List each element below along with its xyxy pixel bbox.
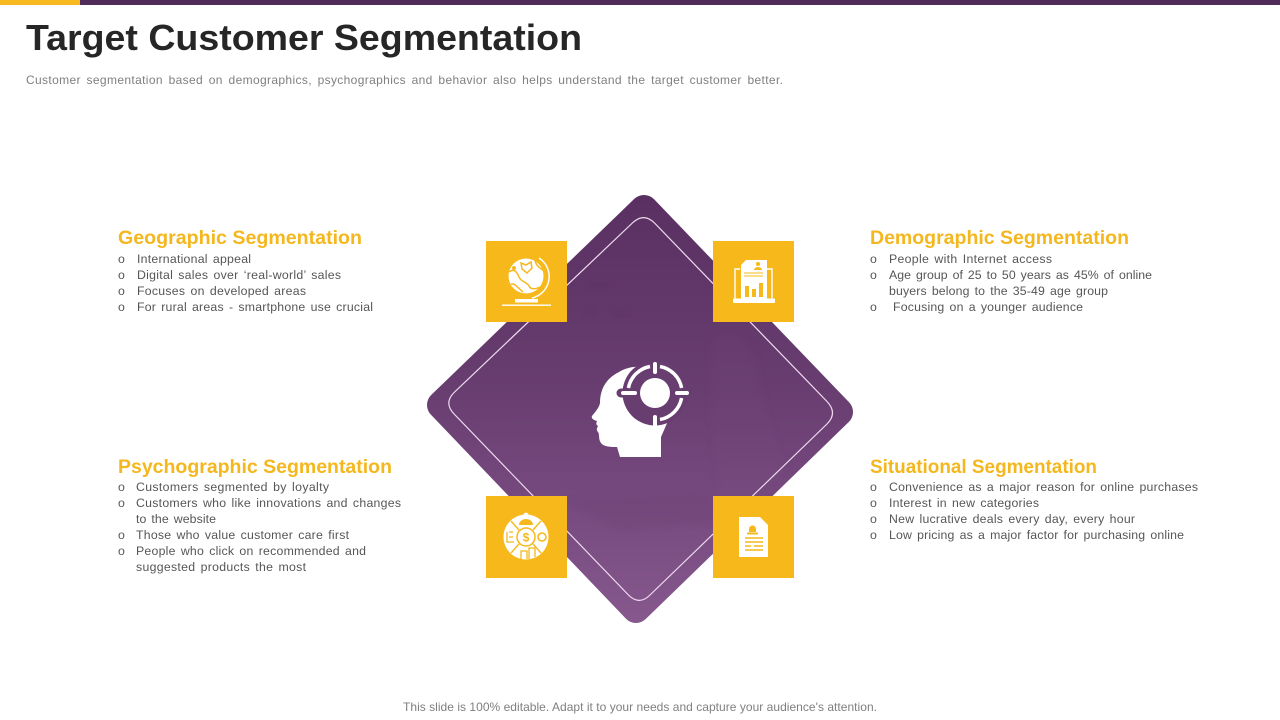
list: demographic: Focusing on a younger audience <box>893 300 1083 314</box>
icon tile: alert document <box>713 496 794 578</box>
list: situational: o <box>870 512 877 526</box>
list: geographic: o <box>118 252 125 266</box>
panel: demographic segmentation <box>870 228 1152 314</box>
footer note: This slide is 100% editable. Adapt it to your needs and capture your audience's attention. <box>403 700 877 714</box>
list: psychographic: o <box>118 496 125 510</box>
list: psychographic: People who click on recommended and <box>136 544 366 558</box>
heading: situational: Situational Segmentation <box>870 457 1097 478</box>
heading: geographic: Geographic Segmentation <box>118 228 362 249</box>
list: demographic: Age group of 25 to 50 years as 45% of online <box>889 268 1152 282</box>
list: demographic: o <box>870 268 877 282</box>
list: geographic: Focuses on developed areas <box>137 284 306 298</box>
list: demographic: o <box>870 300 877 314</box>
list: geographic: o <box>118 284 125 298</box>
heading: psychographic: Psychographic Segmentation <box>118 457 392 478</box>
list: psychographic: Those who value customer care first <box>136 528 350 542</box>
list: psychographic: Customers who like innovations and changes <box>136 496 401 510</box>
list: geographic <box>118 252 373 314</box>
list: psychographic: o <box>118 528 125 542</box>
list: situational: o <box>870 528 877 542</box>
list: demographic: People with Internet access <box>889 252 1052 266</box>
list: psychographic <box>118 480 401 574</box>
list: situational: o <box>870 480 877 494</box>
icon tile: money wheel: $ <box>523 530 530 544</box>
list: situational: Convenience as a major reason for online purchases <box>889 480 1198 494</box>
list: situational <box>870 480 1198 542</box>
icon: head with target <box>592 360 688 457</box>
heading: demographic: Demographic Segmentation <box>870 228 1129 249</box>
list: geographic: o <box>118 300 125 314</box>
top accent bar <box>0 0 1280 5</box>
panel: psychographic segmentation <box>118 457 401 574</box>
list: situational: o <box>870 496 877 510</box>
list: psychographic: o <box>118 480 125 494</box>
list: geographic: o <box>118 268 125 282</box>
list: demographic <box>870 252 1152 314</box>
icon tile: money wheel <box>486 496 567 578</box>
list: demographic: o <box>870 252 877 266</box>
list: psychographic: Customers segmented by loyalty <box>136 480 330 494</box>
icon tile: globe <box>486 241 567 322</box>
panel: geographic segmentation <box>118 228 373 314</box>
list: situational: New lucrative deals every day, every hour <box>889 512 1135 526</box>
list: situational: Low pricing as a major factor for purchasing online <box>889 528 1184 542</box>
list: geographic: Digital sales over ‘real-world’ sales <box>137 268 341 282</box>
title: Target Customer Segmentation <box>26 17 582 58</box>
list: psychographic: suggested products the most <box>136 560 307 574</box>
list: psychographic: o <box>118 544 125 558</box>
list: geographic: For rural areas - smartphone use crucial <box>137 300 373 314</box>
subtitle: Customer segmentation based on demographics, psychographics and behavior also helps understand the target customer better. <box>26 73 783 87</box>
list: situational: Interest in new categories <box>889 496 1039 510</box>
list: geographic: International appeal <box>137 252 251 266</box>
panel: situational segmentation <box>870 457 1198 542</box>
list: psychographic: to the website <box>136 512 216 526</box>
central purple diamond <box>441 209 839 609</box>
list: demographic: buyers belong to the 35-49 age group <box>889 284 1108 298</box>
icon tile: laptop report <box>713 241 794 322</box>
